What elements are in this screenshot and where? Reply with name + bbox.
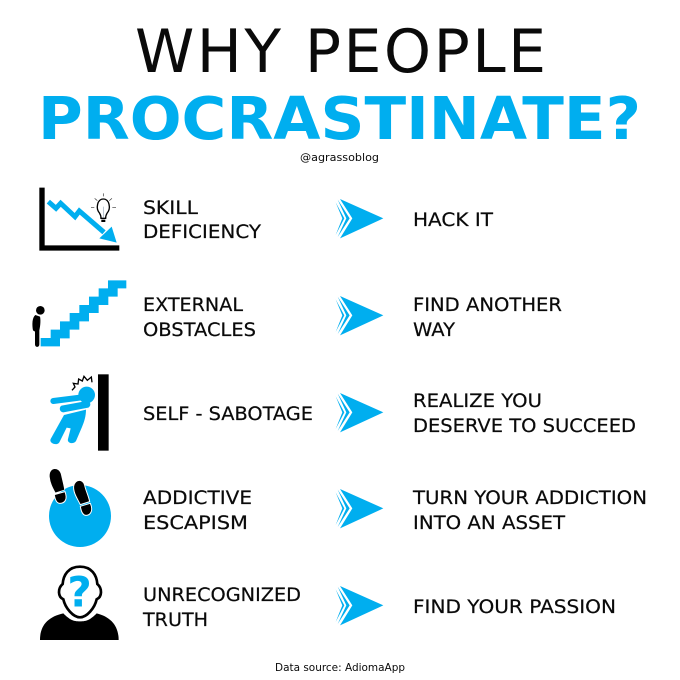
solution: turn your addiction into an asset: INTO AN ASSET	[413, 513, 566, 534]
arrow	[336, 393, 383, 432]
title	[38, 17, 641, 153]
arrow	[336, 199, 383, 238]
solution: find another way: WAY	[413, 320, 456, 341]
solution: find another way	[413, 295, 562, 341]
solution: realize you deserve to succeed: REALIZE YOU	[413, 391, 542, 412]
arrow	[336, 296, 383, 335]
label: unrecognized truth: TRUTH	[142, 610, 208, 631]
label: skill deficiency: SKILL	[143, 198, 199, 219]
label: addictive escapism: ADDICTIVE	[143, 488, 252, 509]
label: unrecognized truth: UNRECOGNIZED	[143, 585, 301, 606]
handle: @agrassoblog	[300, 151, 379, 164]
solution: find your passion: FIND YOUR PASSION	[413, 597, 616, 618]
label: unrecognized truth	[142, 585, 301, 631]
label: skill deficiency	[143, 198, 262, 243]
icon: head with question mark	[40, 567, 119, 640]
solution: find another way: FIND ANOTHER	[413, 295, 562, 316]
icon: footprints on circle	[49, 469, 111, 547]
solution: realize you deserve to succeed: DESERVE TO SUCCEED	[413, 416, 636, 437]
icon: declining chart with light bulb	[42, 188, 119, 248]
solution: realize you deserve to succeed	[413, 391, 636, 437]
solution: turn your addiction into an asset: TURN YOUR ADDICTION	[412, 488, 647, 509]
icon: person hitting wall	[50, 374, 109, 451]
solution: turn your addiction into an asset	[412, 488, 647, 534]
arrow	[336, 489, 383, 528]
label: external obstacles: EXTERNAL	[143, 295, 244, 316]
label: external obstacles	[143, 295, 256, 341]
icon: person before stairs	[32, 280, 126, 347]
label: addictive escapism: ESCAPISM	[143, 513, 248, 534]
label: addictive escapism	[143, 488, 252, 534]
icon: head with question mark: ?	[67, 568, 92, 616]
data source: Data source: AdiomaApp	[275, 661, 405, 674]
title: WHY PEOPLE	[135, 17, 546, 87]
arrow	[336, 586, 383, 625]
title: PROCRASTINATE?	[38, 84, 641, 153]
label: self-sabotage: SELF - SABOTAGE	[143, 404, 313, 425]
label: skill deficiency: DEFICIENCY	[143, 222, 262, 243]
solution: hack it: HACK IT	[413, 210, 494, 231]
label: external obstacles: OBSTACLES	[143, 320, 256, 341]
